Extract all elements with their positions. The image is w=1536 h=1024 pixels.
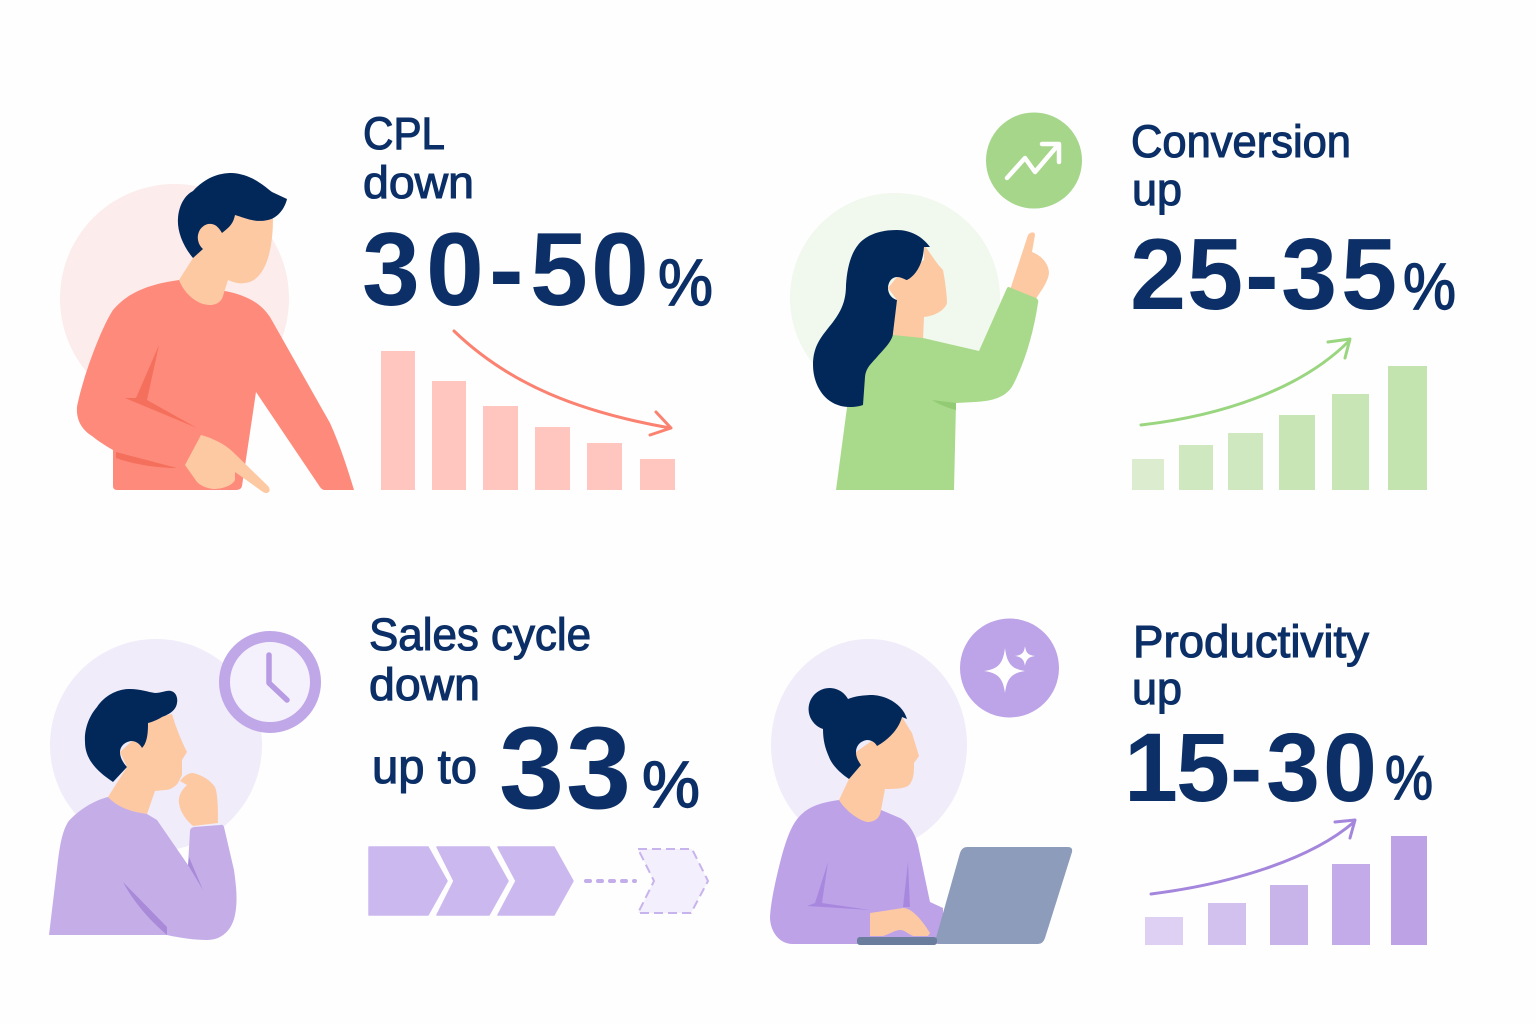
heading: Sales cycle down: Sales cycle (369, 609, 591, 660)
stat: 15-30%: % (1385, 744, 1433, 813)
heading: Productivity up (1132, 616, 1369, 714)
stat: up to 33% (372, 702, 700, 833)
bar chart: rising bars (1145, 836, 1427, 945)
process chevrons (369, 847, 708, 915)
arrow: upward trend (1151, 820, 1355, 894)
stat: 25-35%: % (1403, 249, 1456, 323)
arrow: upward trend (1141, 339, 1350, 425)
illustration: woman pointing up (790, 193, 1049, 490)
heading: Conversion up: Conversion (1131, 116, 1351, 167)
panel: CPL down (60, 108, 713, 493)
arrow: downward trend (454, 331, 671, 435)
heading: Sales cycle down: down (369, 659, 480, 710)
stat: 15-30%: 15-30 (1124, 713, 1377, 822)
icon: sparkle badge (960, 618, 1059, 718)
illustration: man pointing down (60, 173, 354, 493)
heading: Conversion up (1131, 116, 1351, 215)
panel: Conversion up (790, 112, 1456, 490)
icon: clock (224, 636, 316, 728)
heading: Productivity up: Productivity (1133, 616, 1369, 667)
panel: Sales cycle down (49, 609, 708, 940)
heading: CPL down (363, 108, 474, 208)
heading: CPL down: CPL (363, 108, 445, 159)
stat: up to 33%: up to (372, 741, 477, 794)
stat: up to 33%: 33 (499, 702, 631, 833)
heading: Conversion up: up (1132, 164, 1182, 215)
panel: Productivity up (770, 616, 1433, 945)
heading: CPL down: down (363, 157, 474, 208)
stat: up to 33%: % (642, 747, 700, 821)
illustration: man thinking (49, 639, 262, 940)
stat: 30-50%: 30-50 (362, 212, 649, 328)
bar chart: rising bars (1132, 366, 1427, 490)
stat: 30-50%: % (658, 245, 713, 319)
bar chart: falling bars (381, 351, 675, 490)
stat: 25-35%: 25-35 (1130, 219, 1397, 331)
illustration: woman at laptop (770, 639, 1072, 945)
icon: trending up badge (986, 112, 1082, 208)
heading: Productivity up: up (1132, 663, 1182, 714)
heading: Sales cycle down (369, 609, 591, 710)
